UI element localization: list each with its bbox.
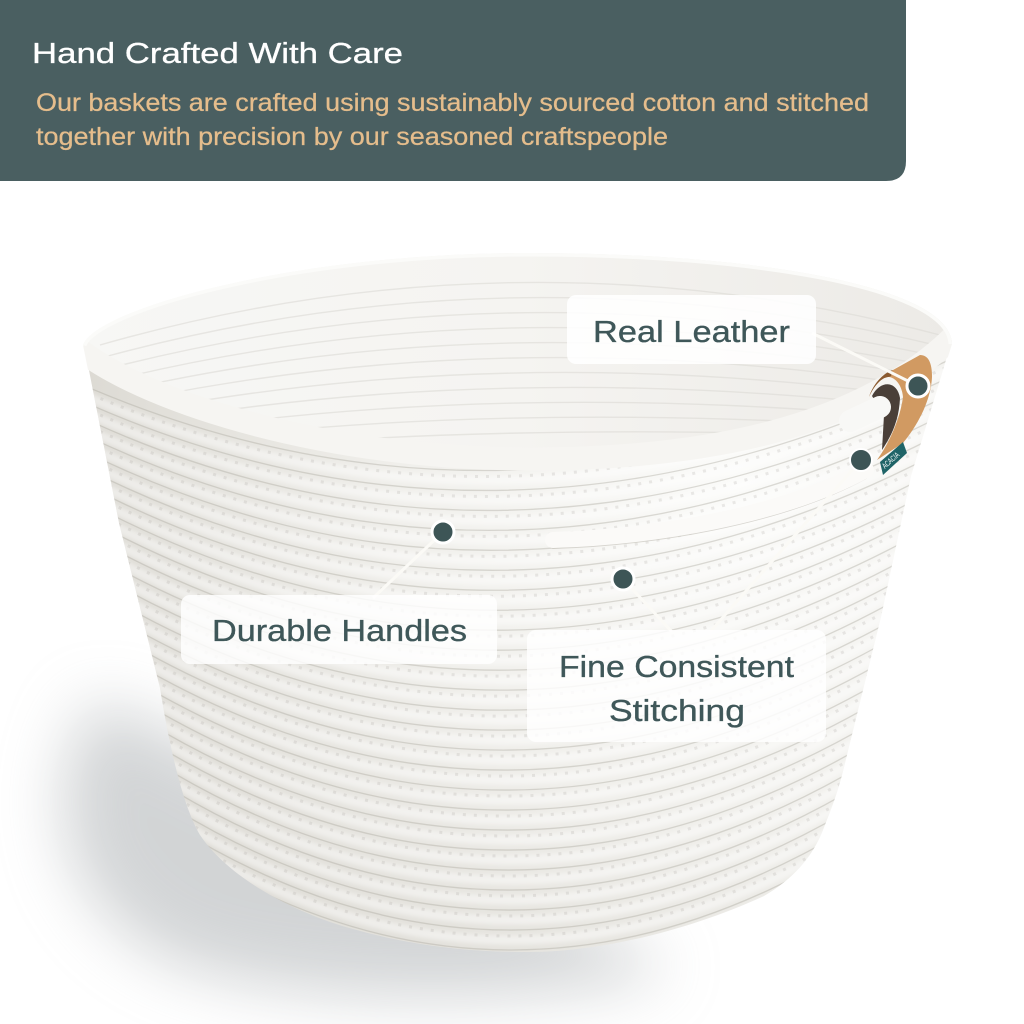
strap inner edge xyxy=(869,370,893,397)
callout: real leather xyxy=(567,295,929,397)
label box xyxy=(181,595,497,664)
floor shadow xyxy=(63,700,665,996)
label text: Real Leather xyxy=(593,314,790,349)
leader lines xyxy=(623,460,861,632)
basket outer body with coiled rope rows xyxy=(89,358,946,952)
banner title: Hand Crafted With Care xyxy=(32,38,403,70)
handle opening xyxy=(872,384,900,450)
leather handle tab xyxy=(850,355,932,475)
marker dot xyxy=(850,449,872,471)
banner description xyxy=(36,89,869,151)
label text: Durable Handles xyxy=(212,613,467,648)
marker dot xyxy=(907,375,929,397)
label text: Stitching xyxy=(609,693,745,728)
label box xyxy=(527,630,826,742)
banner description: Our baskets are crafted using sustainably sourced cotton and stitched xyxy=(36,89,869,117)
callout: fine consistent stitching xyxy=(527,449,872,742)
callout: durable handles xyxy=(181,521,497,664)
leather strap xyxy=(869,355,932,460)
basket interior xyxy=(89,256,944,448)
basket rim xyxy=(80,253,956,459)
leader line xyxy=(812,333,918,386)
header banner xyxy=(0,0,906,181)
handle band xyxy=(553,470,866,548)
marker dot xyxy=(612,568,634,590)
marker dot xyxy=(432,521,454,543)
basket illustration xyxy=(60,250,980,970)
label box xyxy=(567,295,816,364)
banner description: together with precision by our seasoned craftspeople xyxy=(36,123,668,151)
brand tag: ACACIA xyxy=(880,450,902,470)
leader line xyxy=(373,532,443,598)
banner background xyxy=(0,0,906,181)
label text: Fine Consistent xyxy=(559,649,794,684)
rope through handle xyxy=(850,407,880,421)
label text xyxy=(559,649,794,728)
